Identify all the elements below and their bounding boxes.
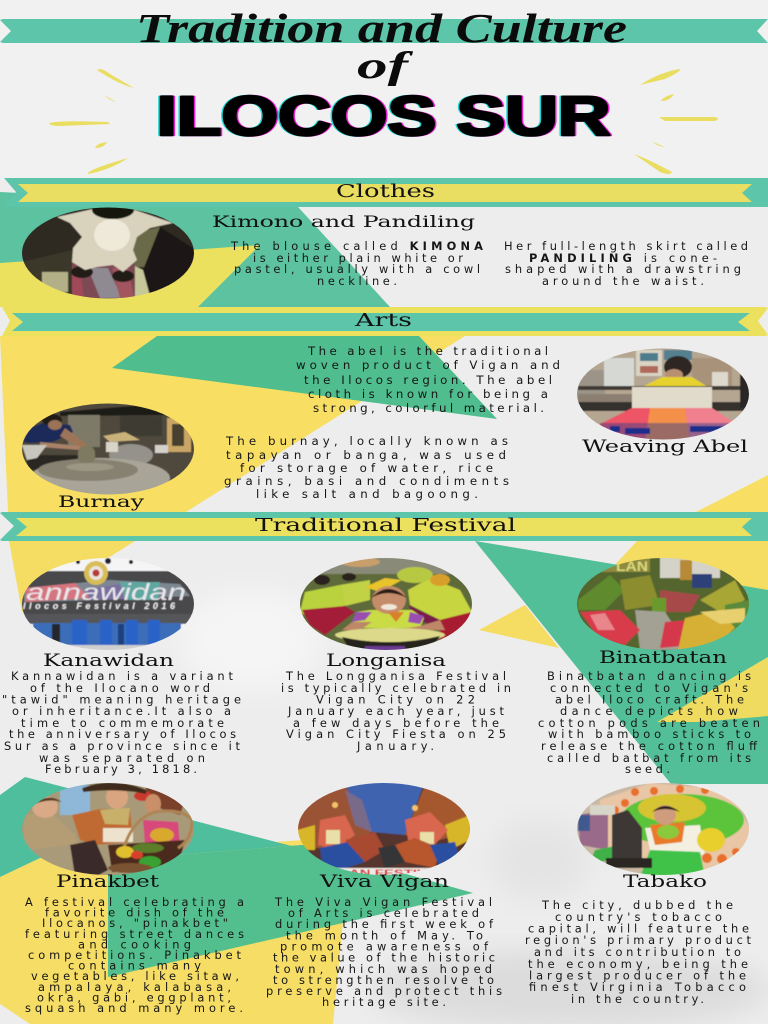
text: kanawidan description: or inheritance.It also a bbox=[12, 704, 231, 718]
label: Binatbatan: Binatbatan bbox=[599, 648, 728, 667]
text: burnay description: like salt and bagoong. bbox=[256, 487, 478, 501]
text: pinakbet description: and cooking bbox=[78, 937, 191, 951]
text: pinakbet description: squash and many more. bbox=[25, 1001, 243, 1015]
heading: Kimono and Pandiling: Kimono and Pandiling bbox=[212, 213, 475, 231]
text: kanawidan description: "tawid" meaning heritage bbox=[2, 692, 241, 706]
text: longanisa description: Vigan City on 22 bbox=[316, 692, 475, 706]
text: kanawidan description: of the Ilocano word bbox=[30, 681, 210, 695]
text: longanisa description: The Longganisa Festival bbox=[285, 669, 506, 683]
text: abel description: the Ilocos region. The abel bbox=[304, 373, 552, 387]
text: kimona description: is either plain white or bbox=[253, 251, 463, 265]
photo: binatbatan: LAN bbox=[616, 558, 648, 574]
text: kanawidan description: February 3, 1818. bbox=[45, 762, 197, 776]
text: longanisa description: is typically celebrated in bbox=[281, 681, 511, 695]
title: ILOCOS SUR: ILOCOS SUR bbox=[156, 84, 610, 147]
text: burnay description: The burnay, locally known as bbox=[225, 434, 508, 448]
banner: Traditional Festival bbox=[0, 512, 768, 541]
text: pinakbet description: okra, gabi, eggplant, bbox=[37, 990, 231, 1004]
text: pandiling description: around the waist. bbox=[542, 274, 704, 288]
text: kimona description bbox=[230, 239, 483, 288]
text: binatbatan description: called batbat from its bbox=[547, 751, 751, 765]
text: tabako description: largest producer of the bbox=[529, 968, 746, 982]
photo: kanawidan: Ilocos Festival 2016 bbox=[23, 601, 176, 611]
background shapes: lower festival section bbox=[0, 777, 473, 1024]
text: kanawidan description: Sur as a province since it bbox=[4, 739, 241, 753]
text: viva vigan description: heritage site. bbox=[322, 995, 446, 1009]
banner: Clothes: Clothes bbox=[336, 182, 435, 202]
text: tabako description: the economy, being the bbox=[528, 957, 748, 971]
banner: Clothes bbox=[4, 178, 768, 207]
text: binatbatan description: dance depicts how bbox=[560, 704, 738, 718]
photo: kimono and pandiling bbox=[22, 208, 194, 298]
label: Viva Vigan: Viva Vigan bbox=[319, 872, 450, 891]
text: kanawidan description bbox=[2, 669, 241, 776]
photo: kanawidan bbox=[20, 556, 196, 655]
photo: burnay pottery bbox=[20, 402, 196, 498]
text: abel description: The abel is the traditional bbox=[307, 344, 548, 358]
text: tabako description: country's tobacco bbox=[555, 910, 722, 924]
photo: viva vigan: AN FESTIV bbox=[349, 868, 427, 878]
text: kimona description: neckline. bbox=[317, 274, 397, 288]
photo: weaving abel bbox=[575, 346, 752, 442]
text: pinakbet description: competitions. Pinakbet bbox=[28, 948, 242, 962]
text: pinakbet description: A festival celebrating a bbox=[25, 895, 244, 909]
decorative rays: left bbox=[49, 69, 134, 174]
text: longanisa description: January. bbox=[356, 739, 434, 753]
title: of: of bbox=[357, 45, 413, 87]
text: viva vigan description: preserve and protect this bbox=[266, 984, 502, 998]
text: viva vigan description: of Arts is celebrated bbox=[288, 906, 479, 920]
text: tabako description: and its contribution to bbox=[534, 945, 741, 959]
text: abel description: cloth is known for being a bbox=[308, 387, 548, 401]
photo: tabako bbox=[575, 781, 751, 877]
label: Weaving Abel: Weaving Abel bbox=[582, 437, 748, 456]
text: pinakbet description: ampalaya, kalabasa, bbox=[38, 980, 231, 994]
banner: Traditional Festival: Traditional Festival bbox=[255, 516, 517, 536]
text: binatbatan description: Binatbatan dancing is bbox=[547, 669, 751, 683]
photo: viva vigan bbox=[295, 781, 473, 878]
photo: binatbatan bbox=[575, 556, 751, 652]
label: Pinakbet: Pinakbet bbox=[56, 872, 159, 891]
title: Tradition and Culture: Tradition and Culture bbox=[136, 5, 627, 51]
text: longanisa description: Vigan City Fiesta on 25 bbox=[286, 727, 506, 741]
text: viva vigan description: The Viva Vigan Festival bbox=[274, 895, 492, 909]
text: pinakbet description: vegetables, like sitaw, bbox=[31, 969, 239, 983]
text: viva vigan description: during the first week of bbox=[275, 917, 494, 931]
text: kimona description: pastel, usually with a cowl bbox=[234, 262, 480, 276]
text: pinakbet description: featuring street dances bbox=[25, 927, 244, 941]
label: Tabako: Tabako bbox=[623, 872, 707, 891]
text: longanisa description: January each year, just bbox=[287, 704, 505, 718]
background shapes: arts section bbox=[0, 336, 768, 512]
title banner bbox=[0, 19, 768, 43]
text: pinakbet description bbox=[25, 895, 244, 1015]
decorative rays: right bbox=[634, 69, 718, 174]
text: burnay description: tapayan or banga, was used bbox=[226, 448, 506, 462]
text: burnay description bbox=[224, 434, 509, 501]
text: pinakbet description: Ilocanos, "pinakbet" bbox=[42, 916, 228, 930]
text: kanawidan description: Kannawidan is a variant bbox=[11, 669, 234, 683]
text: viva vigan description bbox=[266, 895, 502, 1009]
photo: pinakbet bbox=[20, 781, 196, 877]
text: longanisa description bbox=[281, 669, 511, 753]
label: Kanawidan: Kanawidan bbox=[43, 651, 175, 670]
title: ILOCOS SUR: ILOCOS SUR bbox=[158, 84, 612, 147]
text: binatbatan description: seed. bbox=[625, 762, 670, 776]
background shapes: festival section bbox=[9, 541, 768, 784]
photo: longanisa bbox=[298, 556, 474, 652]
text: pinakbet description: contains many bbox=[68, 959, 201, 973]
label: Burnay: Burnay bbox=[58, 492, 144, 511]
text: viva vigan description: town, which was hoped bbox=[275, 962, 492, 976]
text: viva vigan description: the month of May. To bbox=[286, 928, 483, 942]
text: binatbatan description: with bamboo sticks to bbox=[548, 727, 751, 741]
text: pinakbet description: favorite dish of the bbox=[45, 906, 224, 920]
text: tabako description: in the country. bbox=[571, 992, 704, 1006]
text: pandiling description bbox=[504, 239, 748, 288]
text: kimona description: The blouse called KIMONA bbox=[230, 239, 483, 253]
text: tabako description: capital, will feature the bbox=[528, 922, 749, 936]
photo: kanawidan: annawidan bbox=[26, 579, 186, 605]
text: kanawidan description: was separated on bbox=[39, 751, 205, 765]
text: pandiling description: Her full-length skirt called bbox=[504, 239, 748, 253]
label: Longanisa: Longanisa bbox=[326, 651, 446, 670]
text: kanawidan description: the anniversary of Ilocos bbox=[9, 727, 236, 741]
banner: Arts bbox=[2, 307, 768, 336]
background shapes: clothes section bbox=[0, 192, 390, 307]
text: tabako description: region's primary product bbox=[525, 933, 752, 947]
text: burnay description: for storage of water, rice bbox=[240, 461, 493, 475]
text: binatbatan description: abel Iloco craft. The bbox=[555, 692, 744, 706]
text: abel description: strong, colorful material. bbox=[313, 401, 544, 415]
text: viva vigan description: promote awareness of bbox=[280, 940, 489, 954]
text: binatbatan description: cotton pods are beaten bbox=[538, 716, 760, 730]
text: viva vigan description: the value of the historic bbox=[273, 950, 495, 964]
text: tabako description: The city, dubbed the bbox=[541, 898, 733, 912]
text: longanisa description: a few days before the bbox=[293, 716, 499, 730]
text: pandiling description: PANDILING is cone- bbox=[529, 251, 717, 265]
text: pandiling description: shaped with a drawstring bbox=[505, 262, 741, 276]
text: viva vigan description: to strengthen resolve to bbox=[273, 973, 494, 987]
text: abel description bbox=[296, 344, 560, 415]
text: binatbatan description: connected to Vigan's bbox=[550, 681, 748, 695]
text: tabako description: finest Virginia Tobacco bbox=[529, 980, 746, 994]
text: burnay description: grains, basi and condiments bbox=[224, 474, 509, 488]
text: abel description: woven product of Vigan and bbox=[296, 358, 560, 372]
banner: Arts: Arts bbox=[353, 311, 412, 331]
title: ILOCOS SUR: ILOCOS SUR bbox=[155, 84, 609, 147]
text: binatbatan description bbox=[538, 669, 760, 776]
text: tabako description bbox=[525, 898, 752, 1006]
text: binatbatan description: release the cotton fluff bbox=[541, 739, 758, 753]
text: kanawidan description: time to commemorate bbox=[21, 716, 224, 730]
